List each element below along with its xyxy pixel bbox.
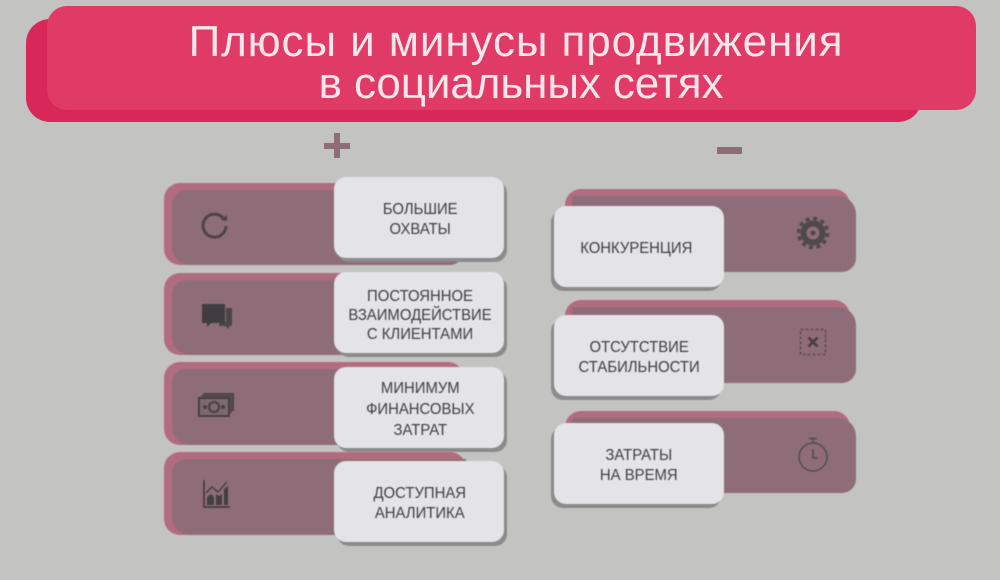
card text: instability: ОТСУТСТВИЕ <box>589 338 689 356</box>
card text: analytics: ДОСТУПНАЯ <box>374 484 466 502</box>
header banner <box>26 6 976 122</box>
panel: pros 4 <box>164 452 508 546</box>
card text: instability: СТАБИЛЬНОСТИ <box>578 359 700 376</box>
panel: pros 1 <box>164 176 508 266</box>
icon: chat bubbles <box>202 304 232 329</box>
plus sign <box>324 133 350 158</box>
panel: cons 1 <box>550 188 856 292</box>
icon: gear <box>796 216 830 250</box>
card text: minimal costs: МИНИМУМ <box>381 380 459 397</box>
card text: reach <box>334 177 504 258</box>
icon: analytics chart <box>202 480 230 508</box>
card text: minimal costs: ФИНАНСОВЫХ <box>366 401 474 418</box>
card text: analytics: АНАЛИТИКА <box>375 505 465 522</box>
card text: instability <box>554 315 724 396</box>
title: в социальных сетях <box>319 59 723 108</box>
card text: time costs: ЗАТРАТЫ <box>606 446 672 464</box>
icon: dashed box with cross <box>799 328 827 356</box>
card text: interaction <box>334 272 504 353</box>
panel: pros 3 <box>164 362 508 452</box>
card text: interaction: ВЗАИМОДЕЙСТВИЕ <box>348 306 492 324</box>
card text: competition <box>554 206 724 287</box>
title <box>189 17 843 108</box>
card text: time costs <box>554 423 724 504</box>
title: Плюсы и минусы продвижения <box>189 17 843 66</box>
card text: minimal costs <box>334 367 504 448</box>
card text: reach: ОХВАТЫ <box>389 221 451 238</box>
card text: time costs: НА ВРЕМЯ <box>600 467 678 484</box>
card text: analytics <box>334 461 504 542</box>
card text: interaction: С КЛИЕНТАМИ <box>367 326 473 342</box>
card text: minimal costs: ЗАТРАТ <box>393 422 447 439</box>
panel: cons 2 <box>550 300 856 400</box>
card text: interaction: ПОСТОЯННОЕ <box>367 288 473 304</box>
minus sign <box>717 147 742 154</box>
card text: reach: БОЛЬШИЕ <box>383 200 457 218</box>
card text: competition: КОНКУРЕНЦИЯ <box>580 240 692 257</box>
panel: pros 2 <box>164 272 508 358</box>
icon: stopwatch <box>798 437 828 472</box>
icon: banknotes <box>198 392 234 418</box>
panel: cons 3 <box>550 410 856 508</box>
icon: refresh <box>201 212 228 240</box>
